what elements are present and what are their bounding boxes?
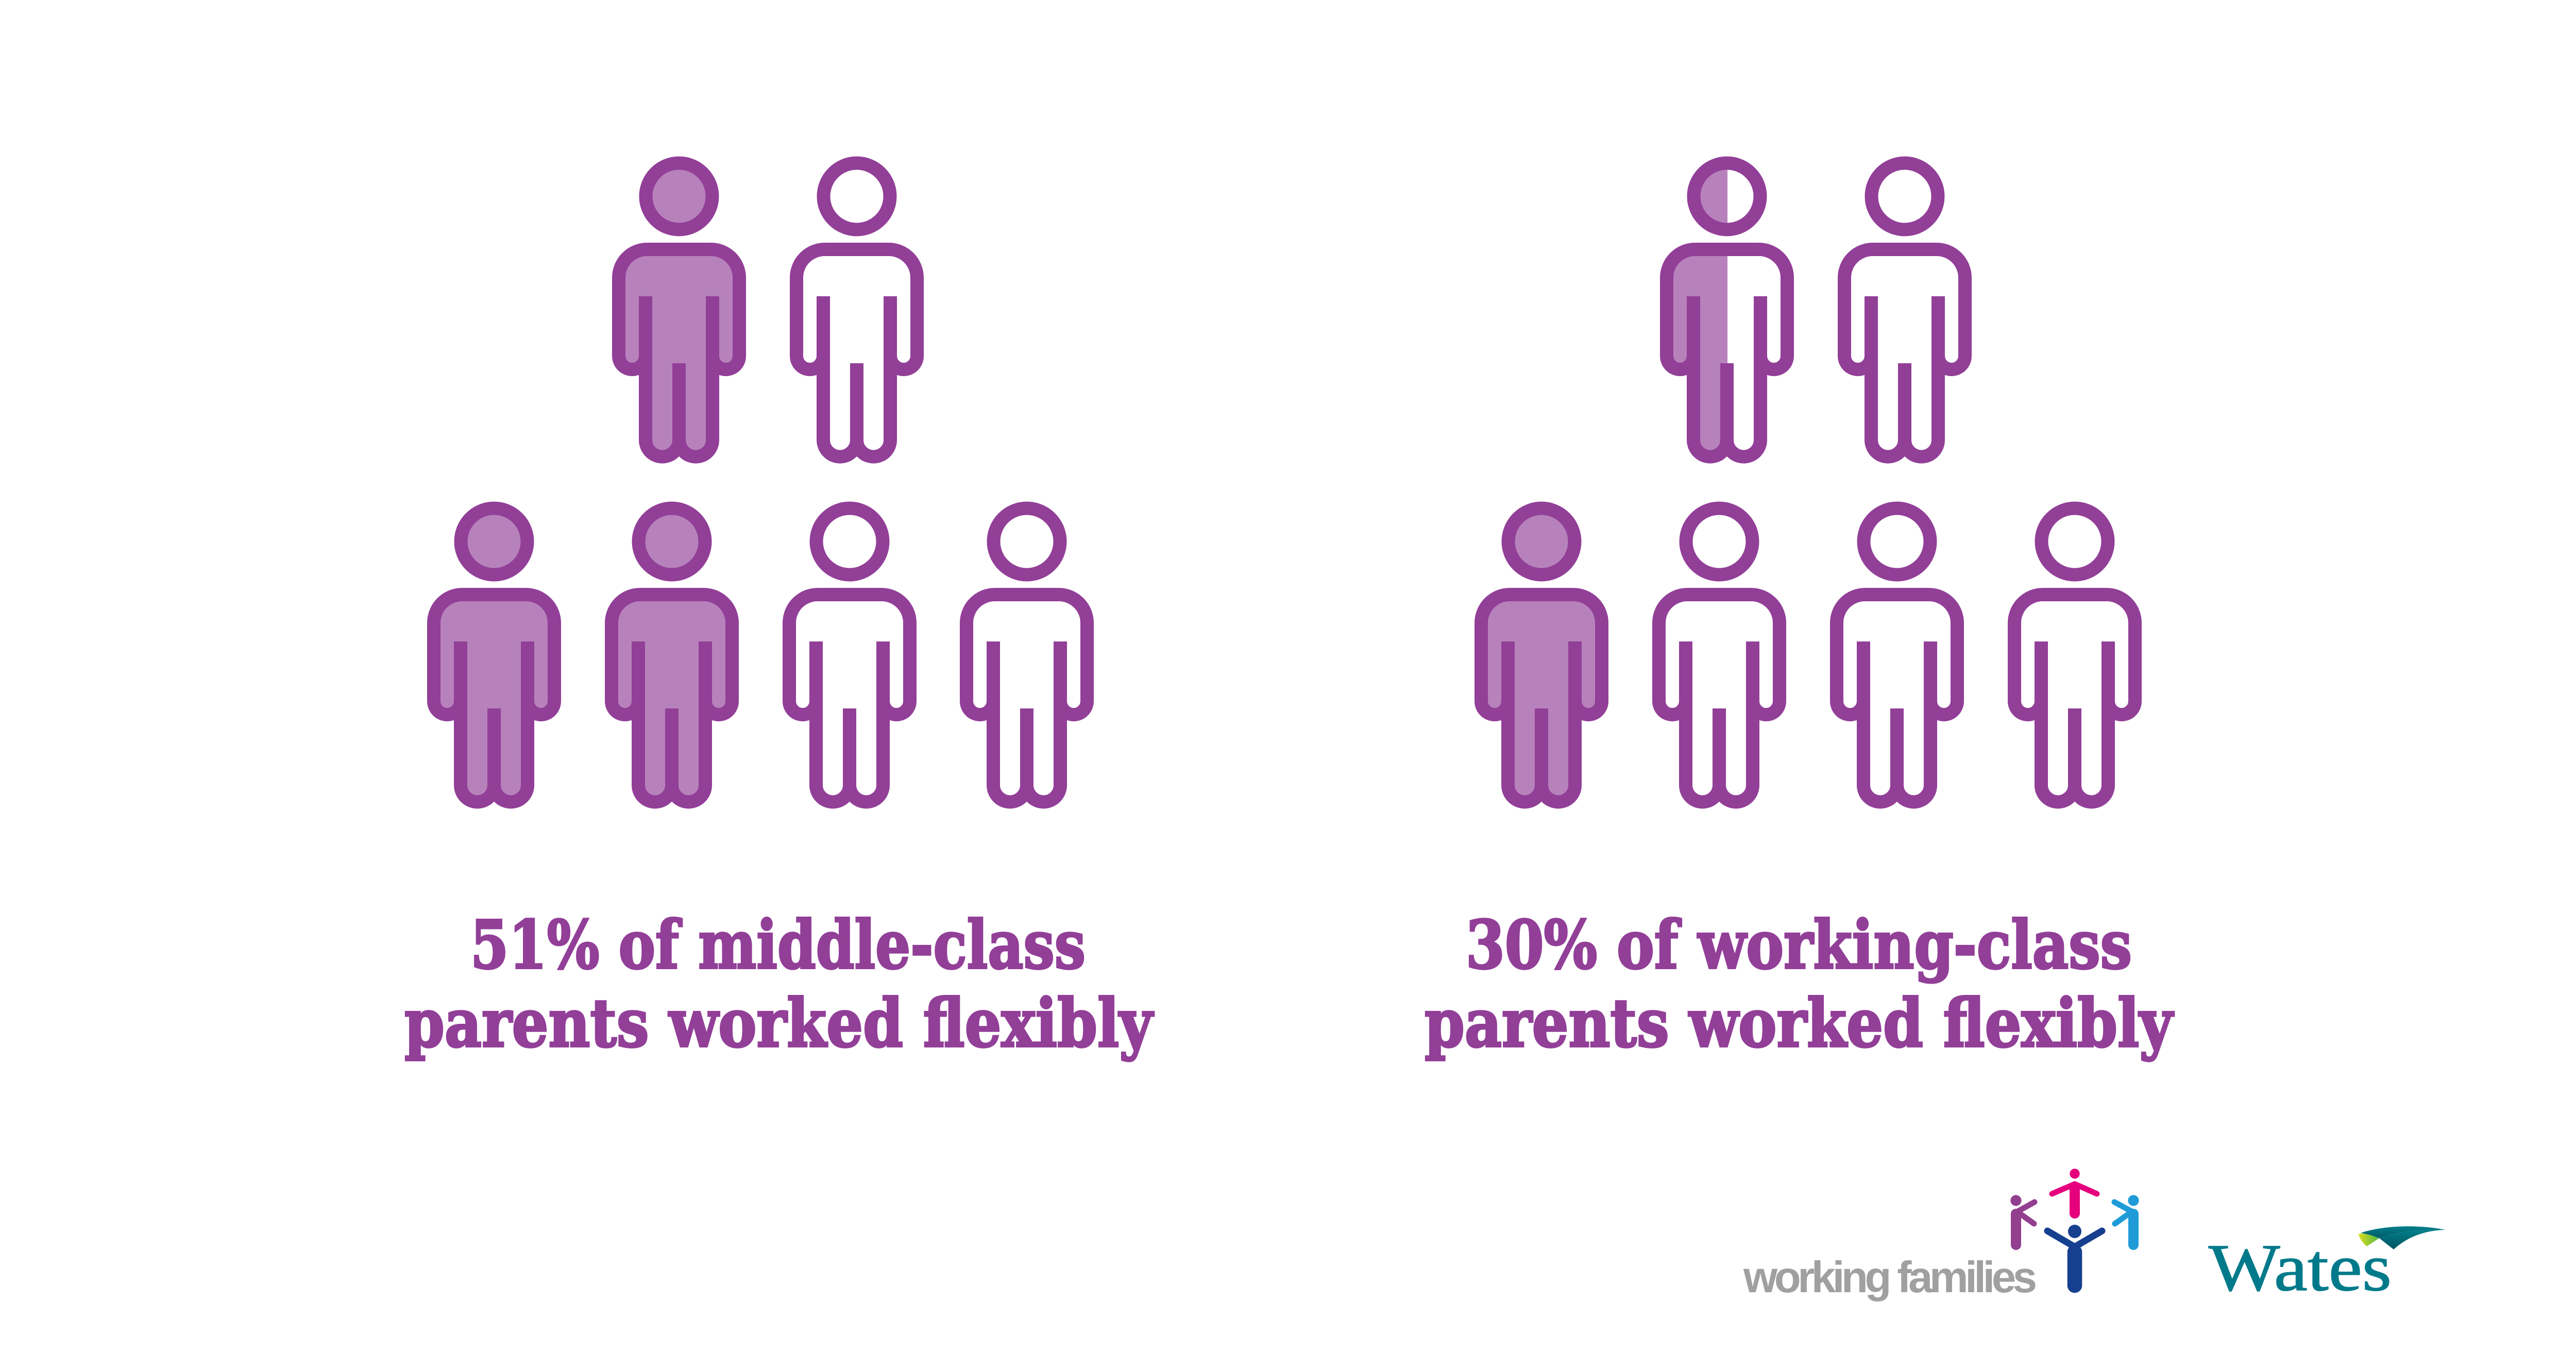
icon: person empty, bottom row 3	[789, 508, 910, 802]
icon: person empty, bottom row 2	[1659, 508, 1780, 802]
icon: person empty, top row 2	[1844, 163, 1965, 456]
icon: person empty, bottom row 3	[1837, 508, 1957, 802]
icon: person filled, bottom row 1	[434, 508, 554, 802]
caption: middle-class statistic	[404, 906, 1154, 1062]
caption: middle-class statistic: 51% of middle-class	[470, 906, 1086, 984]
icon: person half filled, top row 1	[1667, 163, 1787, 456]
logo wordmark: working families	[1743, 1253, 2037, 1302]
icon: person filled, top row 1	[619, 163, 739, 456]
icon: person empty, top row 2	[796, 163, 917, 456]
logo figure: purple	[2010, 1195, 2035, 1245]
logo leaf: teal lower panel	[2379, 1229, 2446, 1249]
logo figure: blue	[2114, 1195, 2139, 1245]
panel: middle-class parents	[404, 163, 1154, 1062]
logo figure: navy	[2047, 1225, 2102, 1286]
logo leaf: teal upper panel	[2361, 1226, 2446, 1238]
caption: working-class statistic	[1425, 906, 2174, 1062]
caption: working-class statistic: parents worked flexibly	[1425, 985, 2174, 1062]
logo: Wates	[2209, 1226, 2446, 1305]
logo leaf: green	[2359, 1233, 2379, 1246]
logo wordmark: Wates	[2209, 1231, 2392, 1305]
icon: person filled, bottom row 1	[1481, 508, 1602, 802]
icon: person filled, bottom row 2	[612, 508, 732, 802]
panel: working-class parents	[1425, 163, 2174, 1062]
logo: working families	[1743, 1169, 2139, 1302]
logo figure: pink	[2052, 1169, 2097, 1213]
caption: working-class statistic: 30% of working-class	[1466, 906, 2132, 984]
icon: person empty, bottom row 4	[967, 508, 1087, 802]
icon: person empty, bottom row 4	[2014, 508, 2135, 802]
caption: middle-class statistic: parents worked flexibly	[404, 985, 1154, 1062]
